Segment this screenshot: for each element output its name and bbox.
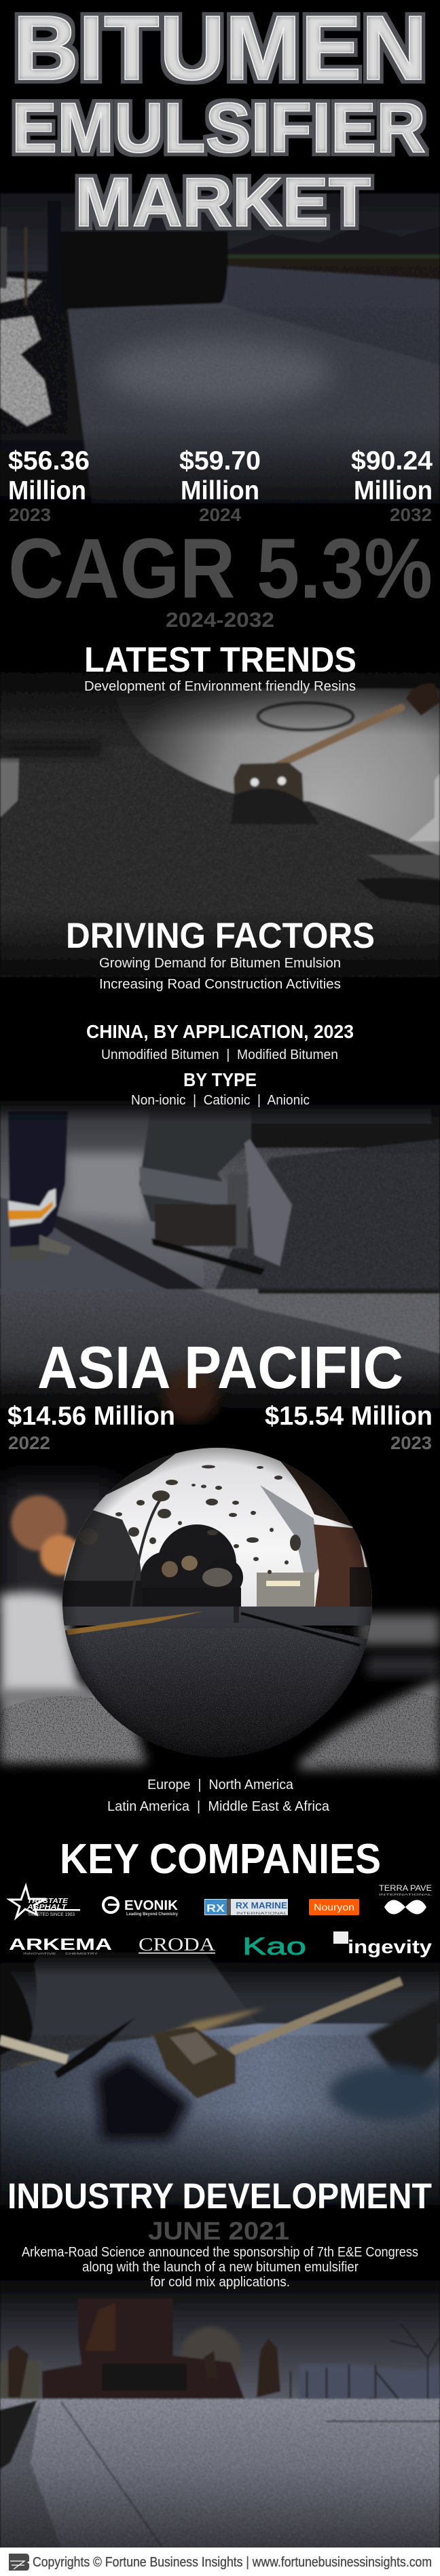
application segment [86, 1021, 354, 1062]
title [12, 0, 427, 241]
driving factors list: Increasing Road Construction Activities [99, 977, 341, 992]
logo: Evonik [103, 1898, 179, 1917]
driving factors list [99, 956, 341, 992]
logo: RX Marine [204, 1899, 288, 1916]
logo: Croda: CRODA [139, 1934, 216, 1955]
other regions: Latin America | Middle East & Africa [107, 1799, 330, 1814]
market value 2024: Million [181, 476, 259, 505]
logo: Nouryon [309, 1899, 359, 1915]
driving factors heading: DRIVING FACTORS [66, 916, 375, 956]
latest trends heading: LATEST TRENDS [84, 640, 356, 680]
development date: JUNE 2021 [148, 2217, 289, 2245]
title: EMULSIFIER [12, 89, 426, 168]
worker legs [8, 1111, 71, 1260]
water droplets [79, 1465, 301, 1587]
photo: asphalt pile with shovel [0, 661, 440, 977]
photo: shovels on hot asphalt [0, 1949, 440, 2205]
footer [0, 2548, 440, 2576]
CAGR figure: 2024-2032 [166, 608, 274, 632]
photo: blurred bokeh and ground [0, 1482, 440, 1950]
icon: Fortune Business Insights logo [9, 2554, 29, 2571]
icon: pick left [0, 2017, 136, 2079]
logo: Arkema [9, 1936, 112, 1955]
market value 2032 [351, 446, 433, 525]
photo: road surface with rain puddles [0, 1289, 440, 1423]
asia pacific 2023 value [265, 1402, 433, 1453]
workers silhouettes [8, 2339, 280, 2398]
logo: RX Marine: RX MARINE [236, 1900, 287, 1910]
market value 2032: $90.24 [351, 446, 433, 476]
market value 2024 [179, 446, 261, 525]
logo: Evonik: Leading Beyond Chemistry [126, 1912, 178, 1917]
title: MARKET [75, 164, 371, 241]
type segment: BY TYPE [183, 1069, 257, 1090]
icon: crystal ball reflecting a rainy street [62, 1448, 373, 1757]
market value 2023: 2023 [9, 505, 51, 525]
development description: along with the launch of a new bitumen emulsifier [82, 2260, 359, 2275]
market value 2023 [8, 446, 90, 525]
logo: RX Marine: RX [206, 1903, 225, 1915]
paving machine silhouette [42, 2299, 244, 2399]
asia pacific 2023 value: 2023 [390, 1433, 432, 1453]
application segment: CHINA, BY APPLICATION, 2023 [86, 1021, 354, 1042]
application segment: Unmodified Bitumen | Modified Bitumen [101, 1047, 338, 1062]
asia pacific 2022 value: $14.56 Million [7, 1402, 175, 1431]
logo: Evonik: EVONIK [124, 1898, 179, 1913]
logo: Ingevity: ingevity [348, 1936, 432, 1957]
market value 2023: $56.36 [8, 446, 90, 476]
logo: RX Marine: INTERNATIONAL [236, 1912, 287, 1916]
logo: Kao: Kao [242, 1932, 306, 1960]
driving factors list: Growing Demand for Bitumen Emulsion [99, 956, 341, 971]
asia pacific heading: ASIA PACIFIC [37, 1334, 403, 1401]
other regions [107, 1777, 330, 1814]
asia pacific 2022 value [7, 1402, 175, 1453]
icon: shovel [231, 684, 440, 824]
latest trends text: Development of Environment friendly Resins [84, 679, 356, 694]
logo: Terra Pave: INTERNATIONAL [379, 1893, 433, 1896]
sphere edge shading [62, 1448, 372, 1757]
market value 2023: Million [8, 476, 86, 505]
logo: Terra Pave: TERRA PAVE [379, 1883, 432, 1893]
logo: Terra Pave [379, 1883, 433, 1915]
market value 2032: 2032 [390, 505, 432, 525]
development description: for cold mix applications. [150, 2275, 290, 2290]
paver screed [139, 1109, 292, 1275]
market value 2032: Million [354, 476, 433, 505]
bare tree and fence [291, 2324, 440, 2402]
logo: Ingevity [333, 1931, 432, 1957]
photo: road roller [0, 193, 440, 503]
logo: Tri-State Asphalt: TRI-STATE [27, 1897, 69, 1905]
development description [22, 2245, 418, 2290]
market value 2024: $59.70 [179, 446, 261, 476]
photo: road paving crew [0, 2273, 440, 2548]
logo: Arkema: ARKEMA [9, 1936, 112, 1954]
logo: Tri-State Asphalt: ASPHALT [26, 1903, 68, 1911]
market value 2024: 2024 [199, 505, 241, 525]
type segment [131, 1069, 310, 1108]
asia pacific 2022 value: 2022 [8, 1433, 50, 1453]
key companies heading: KEY COMPANIES [60, 1836, 381, 1883]
asia pacific 2023 value: $15.54 Million [265, 1402, 433, 1431]
icon: shovel right [153, 1981, 401, 2098]
photo: paver screed and worker legs [0, 1098, 440, 1294]
logo: Arkema: INNOVATIVE CHEMISTRY [23, 1952, 98, 1955]
other regions: Europe | North America [147, 1777, 294, 1792]
type segment: Non-ionic | Cationic | Anionic [131, 1093, 310, 1108]
logo: Tri-State Asphalt: TRUSTED SINCE 1903 [28, 1912, 75, 1917]
logo: Tri-State Asphalt [10, 1886, 80, 1917]
logo: Nouryon: Nouryon [314, 1902, 354, 1912]
